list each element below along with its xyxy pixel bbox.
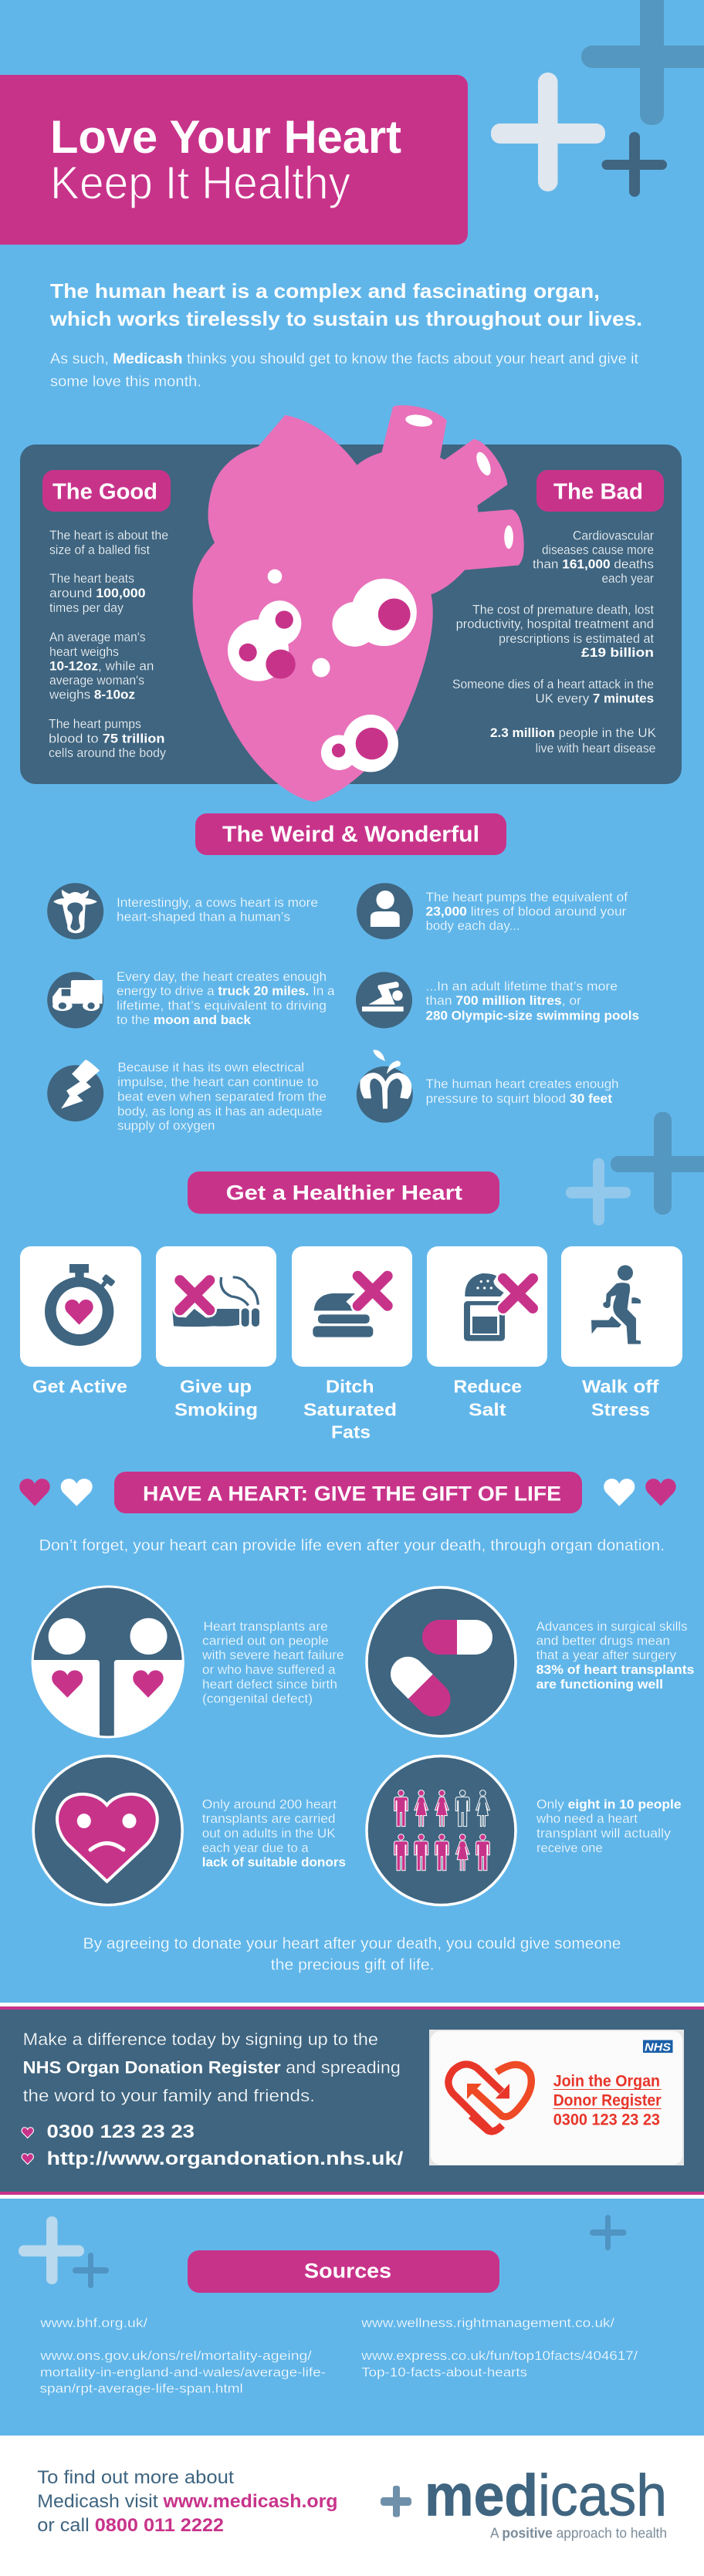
text: donation closing	[83, 1935, 621, 1974]
text: surgery advances: Advances in surgical skills	[536, 1620, 688, 1634]
labels: healthy actions: Reduce	[454, 1376, 522, 1396]
badge: The Good: The Good	[52, 480, 157, 505]
text: electrical impulse fact: body, as long as it has an adequate	[117, 1104, 323, 1119]
badge: The Good	[42, 470, 171, 512]
heading: The Weird & Wonderful: The Weird & Wonderful	[222, 823, 479, 847]
text: sign up message: NHS Organ Donation Register and spreading	[23, 2058, 401, 2077]
text: lifetime fact: 280 Olympic-size swimming pools	[426, 1009, 639, 1023]
text: electrical impulse fact: impulse, the heart can continue to	[117, 1075, 318, 1090]
intro paragraph: some love this month.	[50, 374, 201, 390]
labels: healthy actions: Give up	[180, 1376, 252, 1396]
text: find out more: or call 0800 011 2222	[37, 2515, 224, 2536]
text: find out more	[37, 2467, 338, 2536]
logo plus	[381, 2486, 411, 2517]
text: lifetime fact: ...In an adult lifetime that’s more	[426, 979, 618, 994]
text: eight in ten: Only eight in 10 people	[536, 1798, 681, 1812]
logo: NHS: NHS	[645, 2040, 671, 2054]
text block: good facts: The heart beats	[49, 571, 134, 586]
text block: bad facts: Cardiovascular	[573, 528, 654, 543]
heading: Sources: Sources	[304, 2260, 391, 2283]
text block: bad facts: live with heart disease	[536, 741, 656, 756]
text block: good facts: around 100,000	[49, 586, 145, 600]
heading: Have a Heart	[114, 1472, 582, 1513]
decorative plus: mid blue	[611, 1112, 704, 1215]
text: sign up message: the word to your family and friends.	[23, 2086, 315, 2105]
text block: bad facts	[452, 528, 657, 756]
text block: good facts	[49, 528, 168, 760]
icon: burger	[313, 1293, 373, 1337]
text: surgery advances: that a year after surgery	[536, 1648, 677, 1662]
text: squirt fact: pressure to squirt blood 30 feet	[426, 1091, 612, 1106]
text: electrical impulse fact	[117, 1060, 327, 1133]
text: electrical impulse fact: beat even when separated from the	[117, 1090, 327, 1104]
text: donor shortage: out on adults in the UK	[202, 1827, 336, 1841]
text: sources left: www.ons.gov.uk/ons/rel/mortality-ageing/	[39, 2349, 312, 2363]
title banner	[0, 75, 468, 245]
text: phone number: 0300 123 23 23	[46, 2121, 195, 2142]
text: sign up message: Make a difference today by signing up to the	[23, 2030, 378, 2049]
icon: phone heart	[22, 2128, 33, 2138]
text: surgery advances	[536, 1620, 694, 1692]
text: cow fact	[117, 895, 318, 925]
text: sources right: www.express.co.uk/fun/top10facts/404617/	[360, 2349, 638, 2363]
text: truck fact: Every day, the heart creates enough	[117, 969, 327, 984]
labels: healthy actions: Walk off	[582, 1376, 659, 1396]
text: donation closing: the precious gift of life.	[271, 1957, 434, 1974]
text block: bad facts: £19 billion	[581, 645, 654, 660]
labels: healthy actions: Ditch	[326, 1376, 374, 1396]
text: truck fact: energy to drive a truck 20 miles. In a	[117, 984, 335, 999]
text: organ donation intro: Don’t forget, your heart can provide life even after your death, through organ donation.	[39, 1537, 665, 1554]
text block: good facts: cells around the body	[49, 745, 166, 760]
icon: cross	[357, 1276, 388, 1306]
icon: person	[357, 883, 413, 939]
decorative plus: navy	[602, 132, 667, 197]
text: blood volume fact: 23,000 litres of blood around your	[426, 904, 627, 919]
text: sources left: span/rpt-average-life-span.html	[40, 2382, 243, 2395]
logo tagline: A positive approach to health	[490, 2525, 667, 2541]
text: cow fact: Interestingly, a cows heart is more	[117, 895, 318, 910]
text: join register: Join the Organ	[553, 2072, 660, 2090]
text: blood volume fact: body each day...	[426, 918, 520, 933]
title: Love Your Heart: Love Your Heart	[50, 111, 401, 163]
text block: bad facts: productivity, hospital treatment and	[455, 617, 654, 631]
icon: cross	[180, 1280, 210, 1310]
heading: Have a Heart: HAVE A HEART: GIVE THE GIFT OF LIFE	[143, 1482, 561, 1505]
icon: ten people pictogram	[367, 1756, 516, 1905]
icon: cow	[47, 883, 103, 939]
text: truck fact: to the moon and back	[117, 1012, 252, 1027]
card: Get Active	[20, 1246, 141, 1367]
text block: good facts: average woman's	[49, 673, 144, 688]
heading: Get a Healthier Heart	[188, 1171, 499, 1214]
text: electrical impulse fact: supply of oxygen	[117, 1118, 215, 1133]
card: Ditch Saturated Fats	[292, 1246, 412, 1367]
text: transplants info	[201, 1620, 344, 1706]
text block: bad facts: The cost of premature death, lost	[472, 602, 654, 617]
text: surgery advances: are functioning well	[536, 1678, 663, 1692]
decorative plus: large blue, top right	[581, 0, 704, 125]
text: truck fact	[117, 969, 335, 1027]
text: electrical impulse fact: Because it has its own electrical	[117, 1060, 304, 1075]
text: sources right	[360, 2317, 638, 2379]
decorative plus: mid light	[566, 1158, 631, 1225]
text block: good facts: weighs 8-10oz	[49, 687, 135, 702]
text block: bad facts: prescriptions is estimated at	[499, 631, 654, 646]
icon: capsules	[367, 1587, 516, 1736]
text: donor shortage: each year due to a	[202, 1841, 309, 1855]
decorative plus: white	[491, 73, 605, 191]
text block: good facts: times per day	[49, 600, 124, 615]
text: donation closing: By agreeing to donate your heart after your death, you could give someone	[83, 1935, 621, 1952]
text: sign up message	[23, 2030, 401, 2105]
text: surgery advances: and better drugs mean	[536, 1635, 670, 1648]
text: transplants info: heart defect since birth	[202, 1678, 337, 1692]
card: Give up Smoking	[156, 1246, 276, 1367]
text block: good facts: size of a balled fist	[49, 543, 150, 557]
labels: healthy actions: Smoking	[174, 1399, 258, 1419]
text: transplants info: or who have suffered a	[202, 1663, 336, 1677]
footer panel	[0, 2436, 704, 2576]
intro heading	[49, 279, 642, 330]
labels: healthy actions: Saturated	[303, 1399, 397, 1419]
labels: healthy actions	[32, 1376, 659, 1442]
text: eight in ten	[536, 1798, 681, 1855]
text: transplants info: with severe heart failure	[201, 1648, 344, 1662]
panel: good and bad	[20, 445, 682, 784]
text: transplants info: carried out on people	[202, 1635, 329, 1648]
decorative plus: sources blue left	[73, 2253, 109, 2288]
icon: stopwatch	[45, 1264, 116, 1346]
logo: donor heart	[448, 2064, 531, 2131]
subtitle: Keep It Healthy: Keep It Healthy	[50, 157, 350, 208]
text: lifetime fact: than 700 million litres, or	[426, 993, 581, 1008]
text: join register: Donor Register	[553, 2091, 662, 2109]
labels: healthy actions: Stress	[591, 1399, 650, 1419]
text: sources left: www.bhf.org.uk/	[39, 2317, 147, 2331]
text block: good facts: An average man's	[49, 630, 145, 644]
heading: Get a Healthier Heart: Get a Healthier Heart	[226, 1181, 462, 1204]
icon: sad heart	[33, 1756, 182, 1905]
text: transplants info: Heart transplants are	[204, 1620, 328, 1634]
text block: bad facts: each year	[602, 571, 654, 586]
labels: healthy actions: Salt	[469, 1399, 506, 1419]
text block: good facts: 10-12oz, while an	[49, 659, 154, 673]
text block: bad facts: UK every 7 minutes	[536, 691, 654, 705]
icon: cigarette	[172, 1277, 259, 1327]
text: find out more: Medicash visit www.medicash.org	[37, 2491, 338, 2512]
intro heading: The human heart is a complex and fascinating organ,	[50, 279, 600, 303]
text: donor shortage: lack of suitable donors	[202, 1856, 346, 1870]
text: sources left	[39, 2317, 326, 2395]
panel: call to action	[0, 2003, 704, 2199]
text: find out more: To find out more about	[37, 2467, 234, 2488]
icon: swimmer	[356, 972, 412, 1028]
text: lifetime fact	[426, 979, 639, 1023]
icon: two people with hearts	[31, 1585, 184, 1738]
text: donor shortage	[202, 1798, 346, 1870]
icon: runner	[591, 1265, 641, 1344]
text: eight in ten: transplant will actually	[536, 1827, 672, 1841]
icon: squirting heart	[357, 1050, 413, 1123]
icon: truck	[47, 972, 103, 1028]
text block: bad facts: diseases cause more	[542, 543, 654, 557]
card: NHS donor register	[429, 2030, 684, 2165]
text block: good facts: heart weighs	[49, 644, 119, 659]
text: sources right: Top-10-facts-about-hearts	[361, 2365, 527, 2379]
logo wordmark: medicash	[425, 2463, 667, 2529]
text: join register	[553, 2072, 662, 2128]
icon: lightning	[47, 1060, 103, 1121]
labels: healthy actions: Fats	[331, 1422, 371, 1442]
text: eight in ten: receive one	[536, 1841, 603, 1855]
text: truck fact: lifetime, that’s equivalent to driving	[117, 999, 327, 1013]
icon: cross	[503, 1279, 533, 1308]
text block: good facts: blood to 75 trillion	[49, 732, 165, 745]
text: join register: 0300 123 23 23	[553, 2111, 660, 2128]
text: transplants info: (congenital defect)	[202, 1692, 313, 1706]
badge: The Bad: The Bad	[553, 480, 643, 505]
intro paragraph	[50, 351, 639, 390]
text block: bad facts: Someone dies of a heart attack in the	[452, 677, 654, 691]
text: donor shortage: transplants are carried	[202, 1812, 336, 1826]
text: cow fact: heart-shaped than a human’s	[117, 910, 290, 925]
badge: The Bad	[536, 470, 664, 512]
text: eight in ten: who need a heart	[536, 1812, 638, 1826]
card: Walk off Stress	[561, 1246, 682, 1367]
text: surgery advances: 83% of heart transplants	[536, 1663, 694, 1677]
text: sources right: www.wellness.rightmanagement.co.uk/	[360, 2317, 614, 2331]
icon: web heart	[22, 2154, 33, 2164]
intro heading: which works tirelessly to sustain us throughout our lives.	[49, 307, 642, 330]
text: blood volume fact	[426, 890, 628, 933]
heading: The Weird & Wonderful	[195, 813, 506, 855]
icons: hearts left	[19, 1479, 93, 1506]
text block: bad facts: than 161,000 deaths	[533, 557, 654, 571]
text: squirt fact: The human heart creates enough	[426, 1077, 619, 1091]
icons: hearts right	[604, 1479, 676, 1506]
heart illustration	[193, 405, 524, 802]
text: website: http://www.organdonation.nhs.uk/	[46, 2148, 404, 2169]
card: Reduce Salt	[427, 1246, 547, 1367]
icon: salt shaker	[464, 1273, 505, 1341]
text block: bad facts: 2.3 million people in the UK	[490, 725, 657, 740]
text: blood volume fact: The heart pumps the equivalent of	[426, 890, 628, 904]
logo: medicash	[381, 2463, 667, 2541]
labels: healthy actions: Get Active	[32, 1376, 127, 1396]
text: squirt fact	[426, 1077, 619, 1106]
text: donor shortage: Only around 200 heart	[202, 1798, 337, 1812]
decorative plus: sources blue right	[590, 2215, 627, 2250]
decorative plus: sources light	[19, 2216, 84, 2284]
intro paragraph: As such, Medicash thinks you should get to know the facts about your heart and give it	[50, 351, 639, 367]
text block: good facts: The heart is about the	[49, 528, 168, 543]
text: sources left: mortality-in-england-and-wales/average-life-	[40, 2365, 326, 2379]
text block: good facts: The heart pumps	[49, 716, 141, 732]
heading: Sources	[188, 2250, 499, 2293]
